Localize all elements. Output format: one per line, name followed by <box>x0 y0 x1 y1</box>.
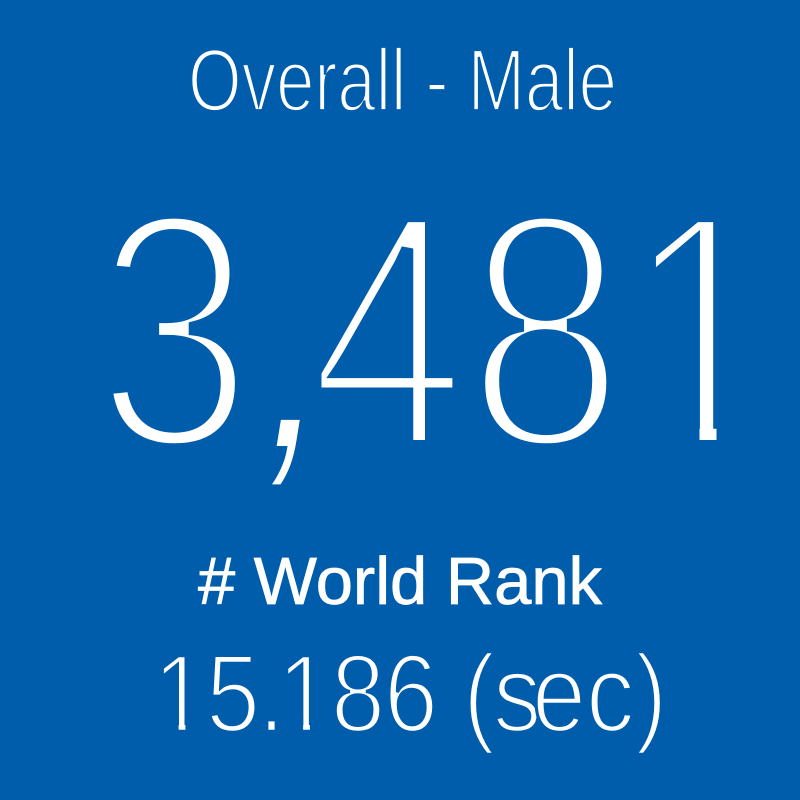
subheading: # World Rank <box>198 544 602 619</box>
time value: 15.186 (sec) <box>153 633 667 756</box>
big number: 3,481 <box>96 142 780 518</box>
title: Overall - Male <box>188 30 617 130</box>
